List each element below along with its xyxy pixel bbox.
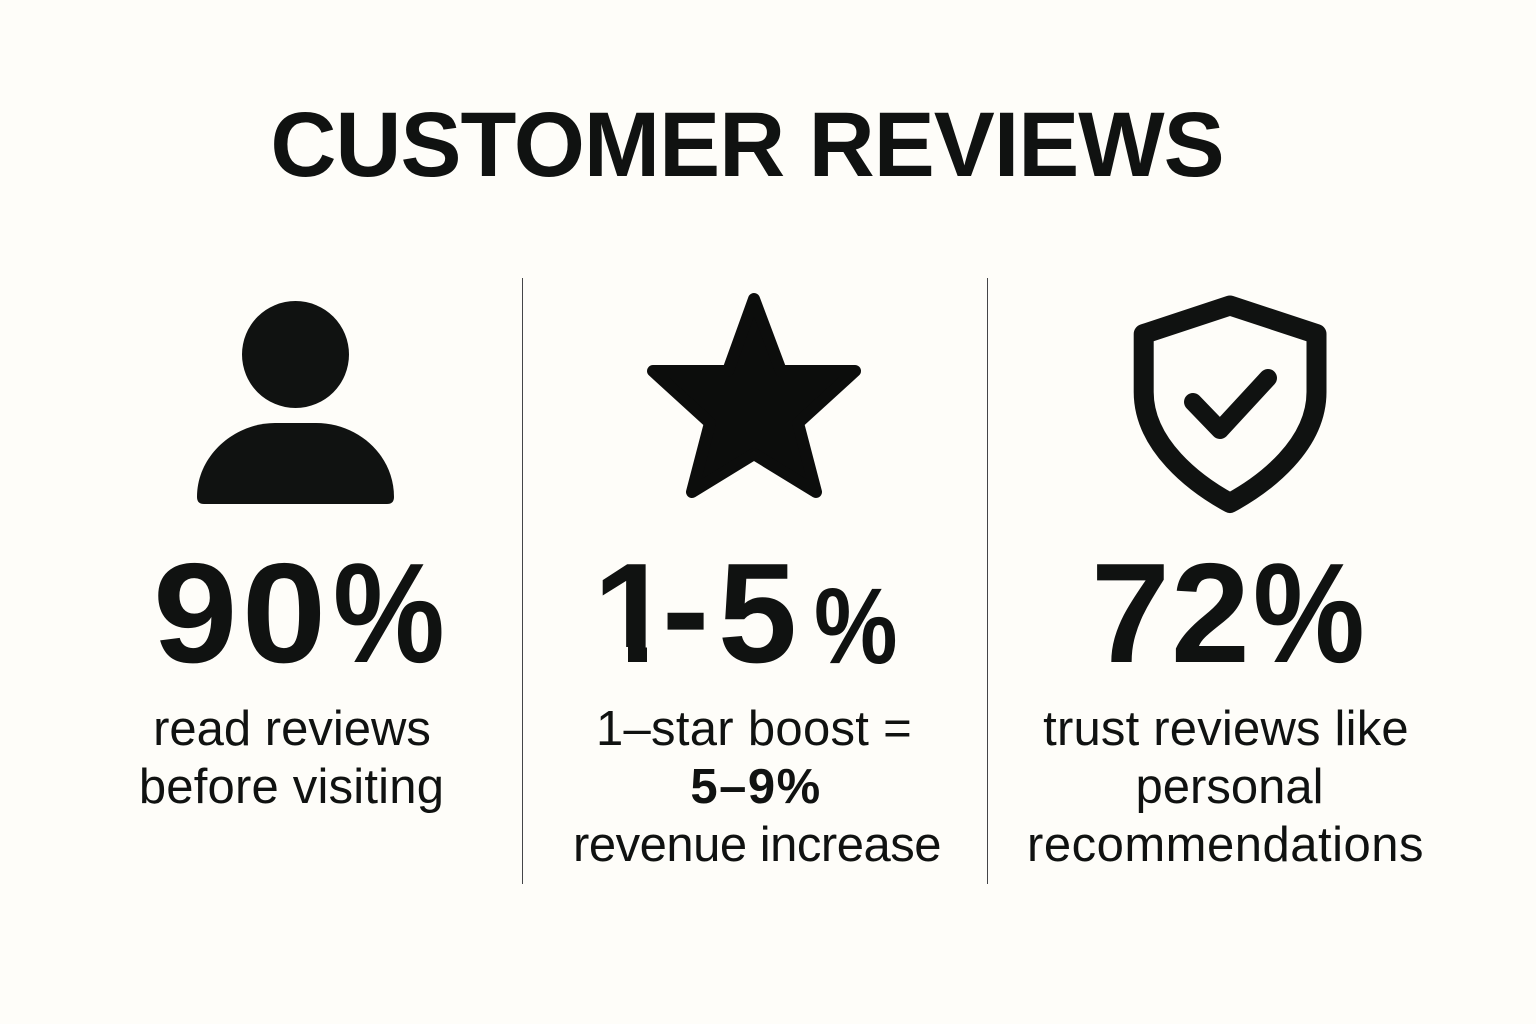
description [1027, 702, 1424, 872]
description [573, 702, 941, 872]
stat: 72%: % [1253, 534, 1365, 693]
description: read reviews [153, 702, 431, 756]
icon: star [647, 293, 861, 498]
panel: 1-5 percent [573, 293, 941, 872]
description: 1–star boost = [596, 702, 912, 756]
divider right [987, 278, 988, 884]
stat: 90% [153, 534, 445, 693]
description: personal [1136, 760, 1323, 814]
description: 5–9% [690, 760, 822, 814]
description: trust reviews like [1043, 702, 1409, 756]
description: revenue increase [573, 818, 941, 872]
stat: 1-5%: % [814, 565, 898, 686]
icon: shield with check [1134, 296, 1326, 514]
panel: 90 percent [139, 301, 445, 814]
icon: person [197, 301, 394, 504]
description: recommendations [1027, 818, 1424, 872]
stat: 1-5% [602, 530, 898, 693]
stat: 1-5%: 5 [718, 534, 797, 693]
stat: 90%: % [333, 534, 445, 693]
stat: 72% [1091, 534, 1365, 693]
stat: 72%: 72 [1091, 534, 1251, 693]
description: before visiting [139, 760, 444, 814]
stat: 1-5%: 1 [593, 534, 672, 693]
stat: 1-5%: - [662, 530, 709, 689]
description [139, 702, 444, 814]
panel: 72 percent [1027, 296, 1424, 872]
divider left [522, 278, 523, 884]
title: CUSTOMER REVIEWS [270, 94, 1224, 196]
stat: 90%: 90 [153, 534, 331, 693]
